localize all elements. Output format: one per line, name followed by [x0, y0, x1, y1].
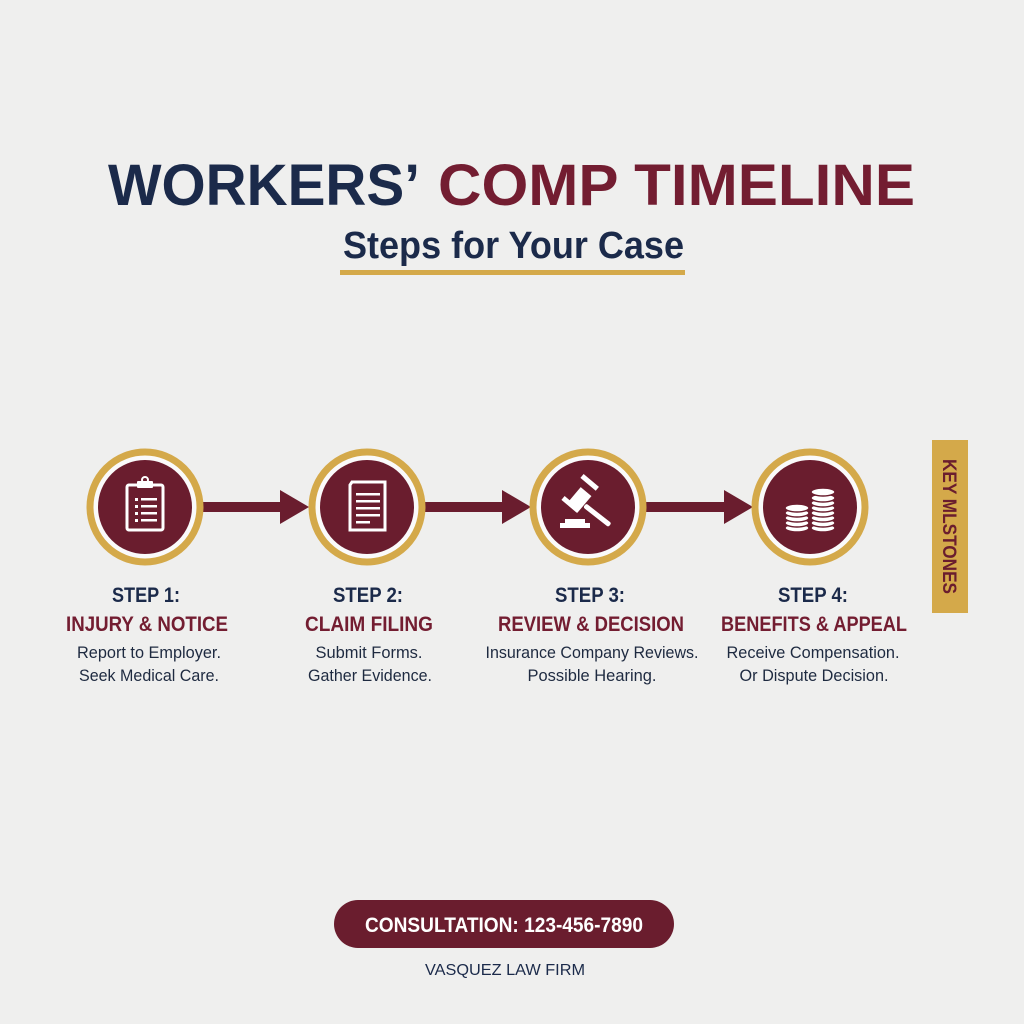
firm name: VASQUEZ LAW FIRM — [425, 962, 585, 979]
step 2 text: Submit Forms. — [316, 643, 422, 662]
step 3 text: STEP 3: — [555, 584, 625, 607]
side tab: key milestones: KEY MLSTONES — [938, 459, 959, 594]
step 4 icon: coins — [755, 452, 865, 562]
consultation button: CONSULTATION: 123-456-7890 — [365, 914, 643, 937]
step 3 text — [486, 584, 698, 685]
step 3 text: REVIEW & DECISION — [498, 613, 684, 636]
step 2 text — [305, 584, 433, 685]
step 1 text: INJURY & NOTICE — [66, 613, 228, 636]
title — [108, 153, 915, 218]
subtitle: Steps for Your Case — [343, 225, 684, 267]
step 1 icon: clipboard — [90, 452, 200, 562]
arrow 2 — [422, 490, 531, 524]
title: WORKERS’ — [108, 153, 420, 218]
subtitle underline — [340, 270, 685, 275]
side tab: key milestones — [932, 440, 968, 613]
step 1 text: Report to Employer. — [77, 643, 221, 662]
step 2 text: Gather Evidence. — [308, 666, 432, 685]
step 4 text — [721, 584, 907, 685]
step 2 text: CLAIM FILING — [305, 613, 433, 636]
consultation button — [334, 900, 674, 948]
title: COMP TIMELINE — [438, 153, 915, 218]
step 3 icon: gavel — [533, 452, 643, 562]
arrow 3 — [644, 490, 753, 524]
step 4 text: BENEFITS & APPEAL — [721, 613, 907, 636]
step 2 text: STEP 2: — [333, 584, 403, 607]
step 1 text: Seek Medical Care. — [79, 666, 219, 685]
step 3 text: Possible Hearing. — [528, 666, 656, 685]
step 4 text: Or Dispute Decision. — [740, 666, 888, 685]
step 1 text — [66, 584, 228, 685]
step 2 icon: document — [312, 452, 422, 562]
step 1 text: STEP 1: — [112, 584, 180, 607]
step 3 text: Insurance Company Reviews. — [486, 643, 698, 662]
step 4 text: STEP 4: — [778, 584, 848, 607]
arrow 1 — [200, 490, 309, 524]
step 4 text: Receive Compensation. — [726, 643, 900, 662]
